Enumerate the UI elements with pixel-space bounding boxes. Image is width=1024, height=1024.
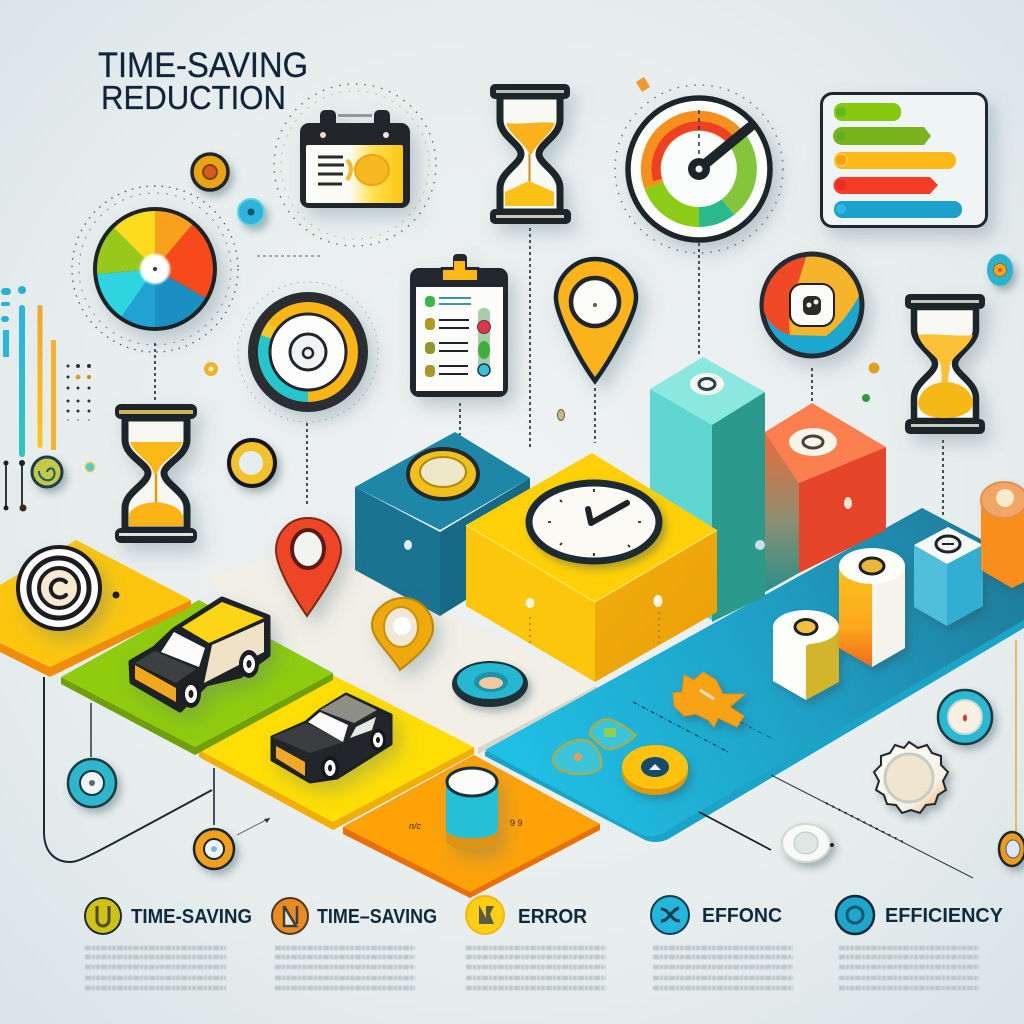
icon: gauge [615, 77, 783, 253]
floor: blue strip [485, 508, 1024, 842]
heading: ERROR [518, 906, 588, 928]
box: red orange [765, 403, 886, 592]
icon: target ring [238, 282, 378, 422]
icon: glasses [553, 719, 636, 774]
icon: white ring [782, 824, 834, 862]
icon: clock [529, 483, 659, 561]
floor: orange tile: n/c [409, 821, 422, 831]
icon: clipboard checklist [410, 254, 508, 397]
bar: blue long [834, 201, 962, 218]
icon [466, 896, 504, 934]
legend: error [466, 896, 606, 988]
description lines [653, 948, 793, 988]
legend: time-saving one [85, 898, 252, 988]
floor: orange tile: 9 9 [510, 818, 523, 828]
icon: teal ring [452, 661, 528, 707]
icon: cylinder [446, 768, 498, 850]
bar: green short [834, 103, 901, 121]
column: blue [914, 527, 983, 626]
left decorative bars [1, 286, 56, 512]
box: mint tall [650, 357, 765, 622]
heading: TIME-SAVING [131, 906, 252, 928]
icon: small teal circle [238, 199, 264, 225]
icon: small teal pin [987, 254, 1013, 286]
icon: orange star shape [673, 672, 745, 727]
dot grid [66, 364, 91, 421]
icon [272, 898, 308, 934]
bar: yellow long [834, 152, 956, 169]
description lines [275, 948, 415, 988]
heading: EFFICIENCY [885, 905, 1004, 927]
box: dark teal [355, 432, 530, 616]
icon: pie chart [72, 186, 238, 352]
legend: effonc [651, 896, 793, 988]
title [98, 46, 308, 116]
connector lines lower right [699, 640, 1016, 878]
description lines [839, 948, 979, 988]
bar: green medium [833, 127, 931, 145]
heading: EFFONC [702, 905, 782, 927]
icon: colorful circle [762, 254, 862, 356]
icon: red map pin [276, 518, 341, 616]
description lines [466, 948, 606, 988]
icon: hourglass left [115, 404, 197, 543]
icon: orange ring right [999, 832, 1024, 866]
connector lines lower left [44, 677, 270, 862]
icon: yellow map pin [556, 259, 636, 381]
icon: teal seal [938, 690, 992, 744]
legend: efficiency [836, 896, 1004, 988]
icon: orange badge [194, 829, 234, 869]
icon: calendar [274, 84, 436, 246]
legend: time-saving two [272, 898, 437, 988]
panel: horizontal bar chart [822, 94, 986, 226]
icon: hourglass top [490, 84, 571, 224]
icon: target on tile [18, 547, 100, 629]
icon: yellow ring [622, 745, 688, 795]
icon: second car [272, 694, 391, 782]
icon [836, 896, 874, 934]
icon [651, 896, 689, 934]
floor: green tile [61, 600, 333, 755]
floor: cream tile [205, 545, 610, 754]
icon: gear [874, 742, 948, 813]
icon: gold map pin [372, 598, 433, 670]
icon: teal badge [68, 759, 116, 807]
bar: red [834, 177, 938, 194]
floor: yellow tile [199, 675, 474, 830]
title: REDUCTION [101, 79, 286, 116]
heading: TIME–SAVING [317, 906, 437, 928]
floor: orange-yellow tile [0, 540, 191, 677]
description lines [85, 948, 226, 988]
column: orange [981, 482, 1024, 588]
title: TIME-SAVING [98, 46, 308, 85]
connector lines [155, 228, 943, 515]
floor: orange tile [343, 755, 600, 898]
icon: hourglass right [905, 294, 985, 434]
icon: small amber circle [192, 154, 228, 190]
small dots [86, 362, 880, 472]
squiggle on strip [633, 702, 775, 753]
icon [85, 898, 121, 934]
traffic dots [478, 308, 490, 376]
icon: ring circle [229, 440, 275, 486]
box: large yellow with clock [466, 453, 717, 682]
icon: first car [131, 599, 268, 710]
column: white and olive [773, 610, 839, 700]
column: tall orange and white [839, 548, 905, 667]
icon: spiral circle [32, 457, 62, 487]
